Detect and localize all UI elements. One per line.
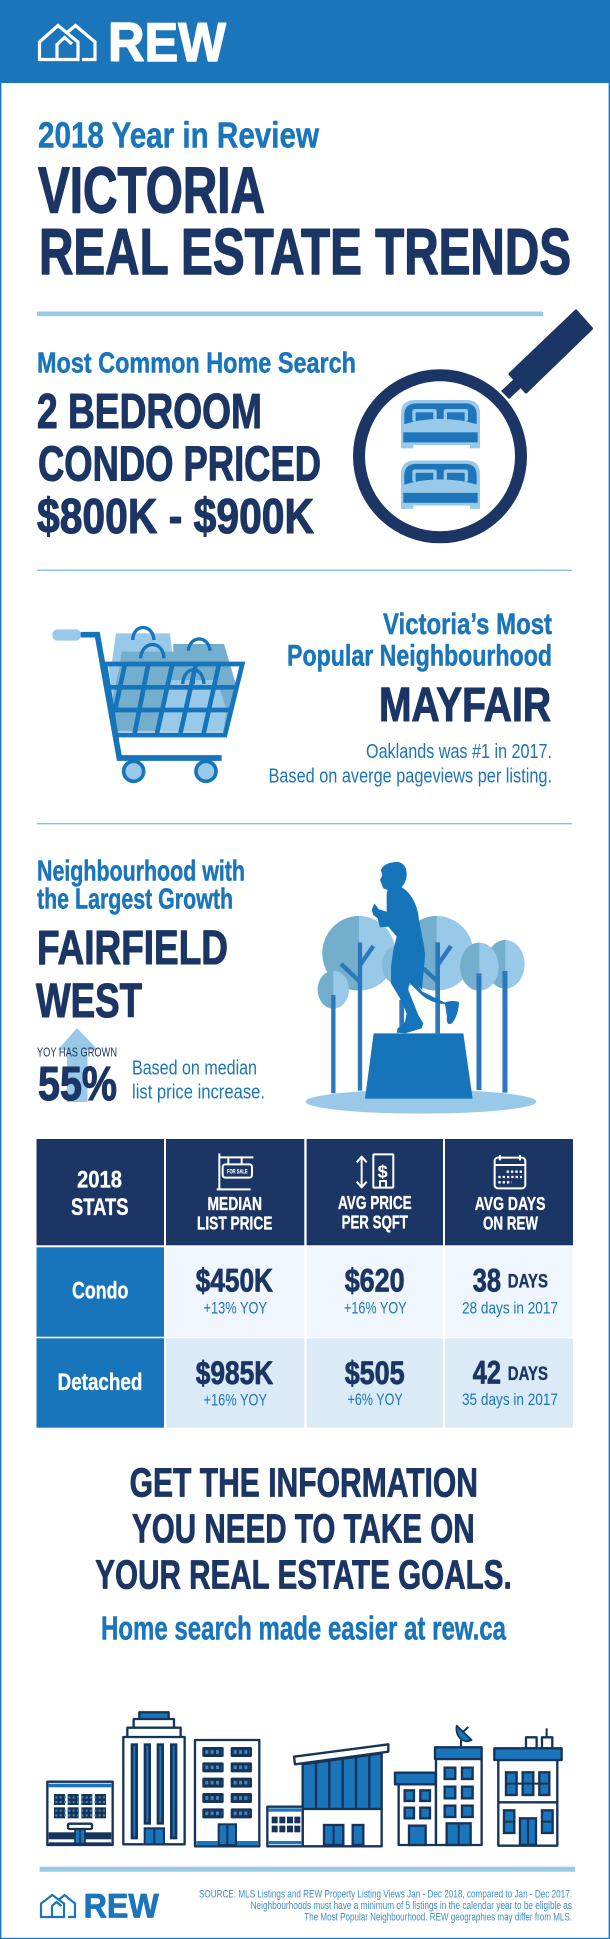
icon: calendar <box>495 1155 525 1188</box>
days on REW value <box>462 1262 558 1317</box>
table title: 2018 <box>77 1166 122 1193</box>
panel: largest growth neighbourhood <box>36 856 536 1114</box>
note text: Oaklands was #1 in 2017. <box>366 741 552 763</box>
median list price value <box>196 1355 274 1409</box>
price per square foot value: +16% YOY <box>344 1299 407 1317</box>
price per square foot value: $505 <box>345 1355 405 1391</box>
logo wordmark: REW <box>108 11 226 73</box>
column heading: average price per square foot <box>338 1192 412 1232</box>
note text <box>268 741 552 788</box>
days on REW value: 28 days in 2017 <box>462 1299 558 1317</box>
growth figure: 55% <box>38 1058 117 1111</box>
icon: price per square foot <box>357 1154 393 1188</box>
icon: bed two <box>401 460 480 509</box>
search result text: $800K - $900K <box>37 490 314 544</box>
call to action <box>95 1460 512 1646</box>
building: slanted roof complex <box>267 1744 388 1846</box>
search result text: 2 BEDROOM <box>37 385 262 439</box>
icon: for sale sign <box>217 1153 253 1189</box>
section heading: the Largest Growth <box>37 884 233 916</box>
column heading: average days on REW: AVG DAYS <box>475 1193 546 1214</box>
median list price value <box>196 1262 273 1318</box>
column heading: average price per square foot: AVG PRICE <box>338 1192 412 1213</box>
price per square foot value <box>344 1262 407 1317</box>
days on REW value <box>462 1354 558 1409</box>
price per square foot value: +6% YOY <box>348 1391 403 1409</box>
days on REW value: 35 days in 2017 <box>462 1391 558 1409</box>
call to action heading: YOU NEED TO TAKE ON <box>132 1506 475 1552</box>
column heading: average days on REW: ON REW <box>483 1212 538 1233</box>
call to action heading: GET THE INFORMATION <box>130 1460 478 1506</box>
price per square foot value: $620 <box>345 1262 405 1298</box>
neighbourhood name: WEST <box>36 975 142 1028</box>
section heading: Most Common Home Search <box>37 348 356 380</box>
illustration: runner statue and trees <box>306 862 536 1114</box>
icon: growth arrow <box>58 1028 98 1102</box>
table title <box>71 1166 128 1221</box>
building: low office <box>47 1782 113 1845</box>
days on REW value: 38 <box>473 1262 501 1298</box>
subtitle: 2018 Year in Review <box>38 114 320 156</box>
growth label: YOY HAS GROWN <box>37 1045 117 1059</box>
section heading: Victoria’s Most <box>383 608 552 641</box>
table row: condo <box>36 1247 573 1337</box>
neighbourhood name: MAYFAIR <box>379 679 551 732</box>
title block <box>38 114 571 288</box>
days on REW value: 42 <box>473 1354 501 1390</box>
median list price value: +13% YOY <box>204 1300 267 1318</box>
source note <box>199 1888 572 1924</box>
days on REW value: DAYS <box>508 1270 548 1292</box>
illustration: city skyline <box>47 1712 562 1846</box>
section heading <box>287 608 552 673</box>
icon: magnifying glass <box>359 311 592 537</box>
column heading: average days on REW <box>475 1193 546 1233</box>
footer REW logo <box>41 1887 160 1925</box>
panel: most common home search <box>37 311 592 544</box>
median list price value: +16% YOY <box>204 1391 267 1409</box>
building: apartment block <box>195 1740 259 1846</box>
footer <box>41 1887 572 1925</box>
column heading: median list price <box>197 1193 272 1233</box>
icon: for sale sign: FOR SALE <box>227 1169 248 1176</box>
neighbourhood name: FAIRFIELD <box>37 922 228 975</box>
growth note: list price increase. <box>132 1082 265 1104</box>
building: apartments with satellite dish <box>395 1726 482 1845</box>
title line one: VICTORIA <box>38 154 265 226</box>
column heading: median list price: MEDIAN <box>208 1193 262 1214</box>
icon: shopping cart with bags <box>52 627 242 781</box>
table: 2018 stats <box>36 1139 573 1428</box>
price per square foot value <box>345 1355 405 1409</box>
table row: detached <box>36 1338 573 1428</box>
section heading: Neighbourhood with <box>37 856 245 888</box>
panel: most popular neighbourhood <box>52 608 552 788</box>
growth note: Based on median <box>132 1058 257 1080</box>
growth note <box>132 1058 265 1104</box>
search result text <box>37 385 321 544</box>
days on REW value: DAYS <box>508 1363 548 1385</box>
search result text: CONDO PRICED <box>38 437 321 491</box>
section heading <box>37 856 245 916</box>
column heading: average price per square foot: PER SQFT <box>342 1211 409 1232</box>
icon: price per square foot: $ <box>378 1161 388 1181</box>
table title: STATS <box>71 1194 128 1221</box>
neighbourhood name <box>36 922 228 1028</box>
building: townhouse with chimneys <box>494 1728 562 1846</box>
row label: Condo <box>72 1277 128 1304</box>
call to action heading <box>95 1460 512 1597</box>
column heading: median list price: LIST PRICE <box>197 1212 272 1233</box>
footer logo wordmark: REW <box>84 1887 160 1925</box>
row label: Detached <box>58 1369 142 1396</box>
table header row <box>36 1139 573 1245</box>
icon: bed one <box>401 400 480 448</box>
header banner with REW logo <box>0 0 610 83</box>
note text: Based on averge pageviews per listing. <box>268 766 552 788</box>
median list price value: $450K <box>196 1262 273 1298</box>
icon: REW house logo <box>40 26 95 60</box>
icon: footer house logo <box>41 1895 75 1917</box>
building: office tower <box>123 1712 185 1844</box>
median list price value: $985K <box>196 1355 274 1391</box>
